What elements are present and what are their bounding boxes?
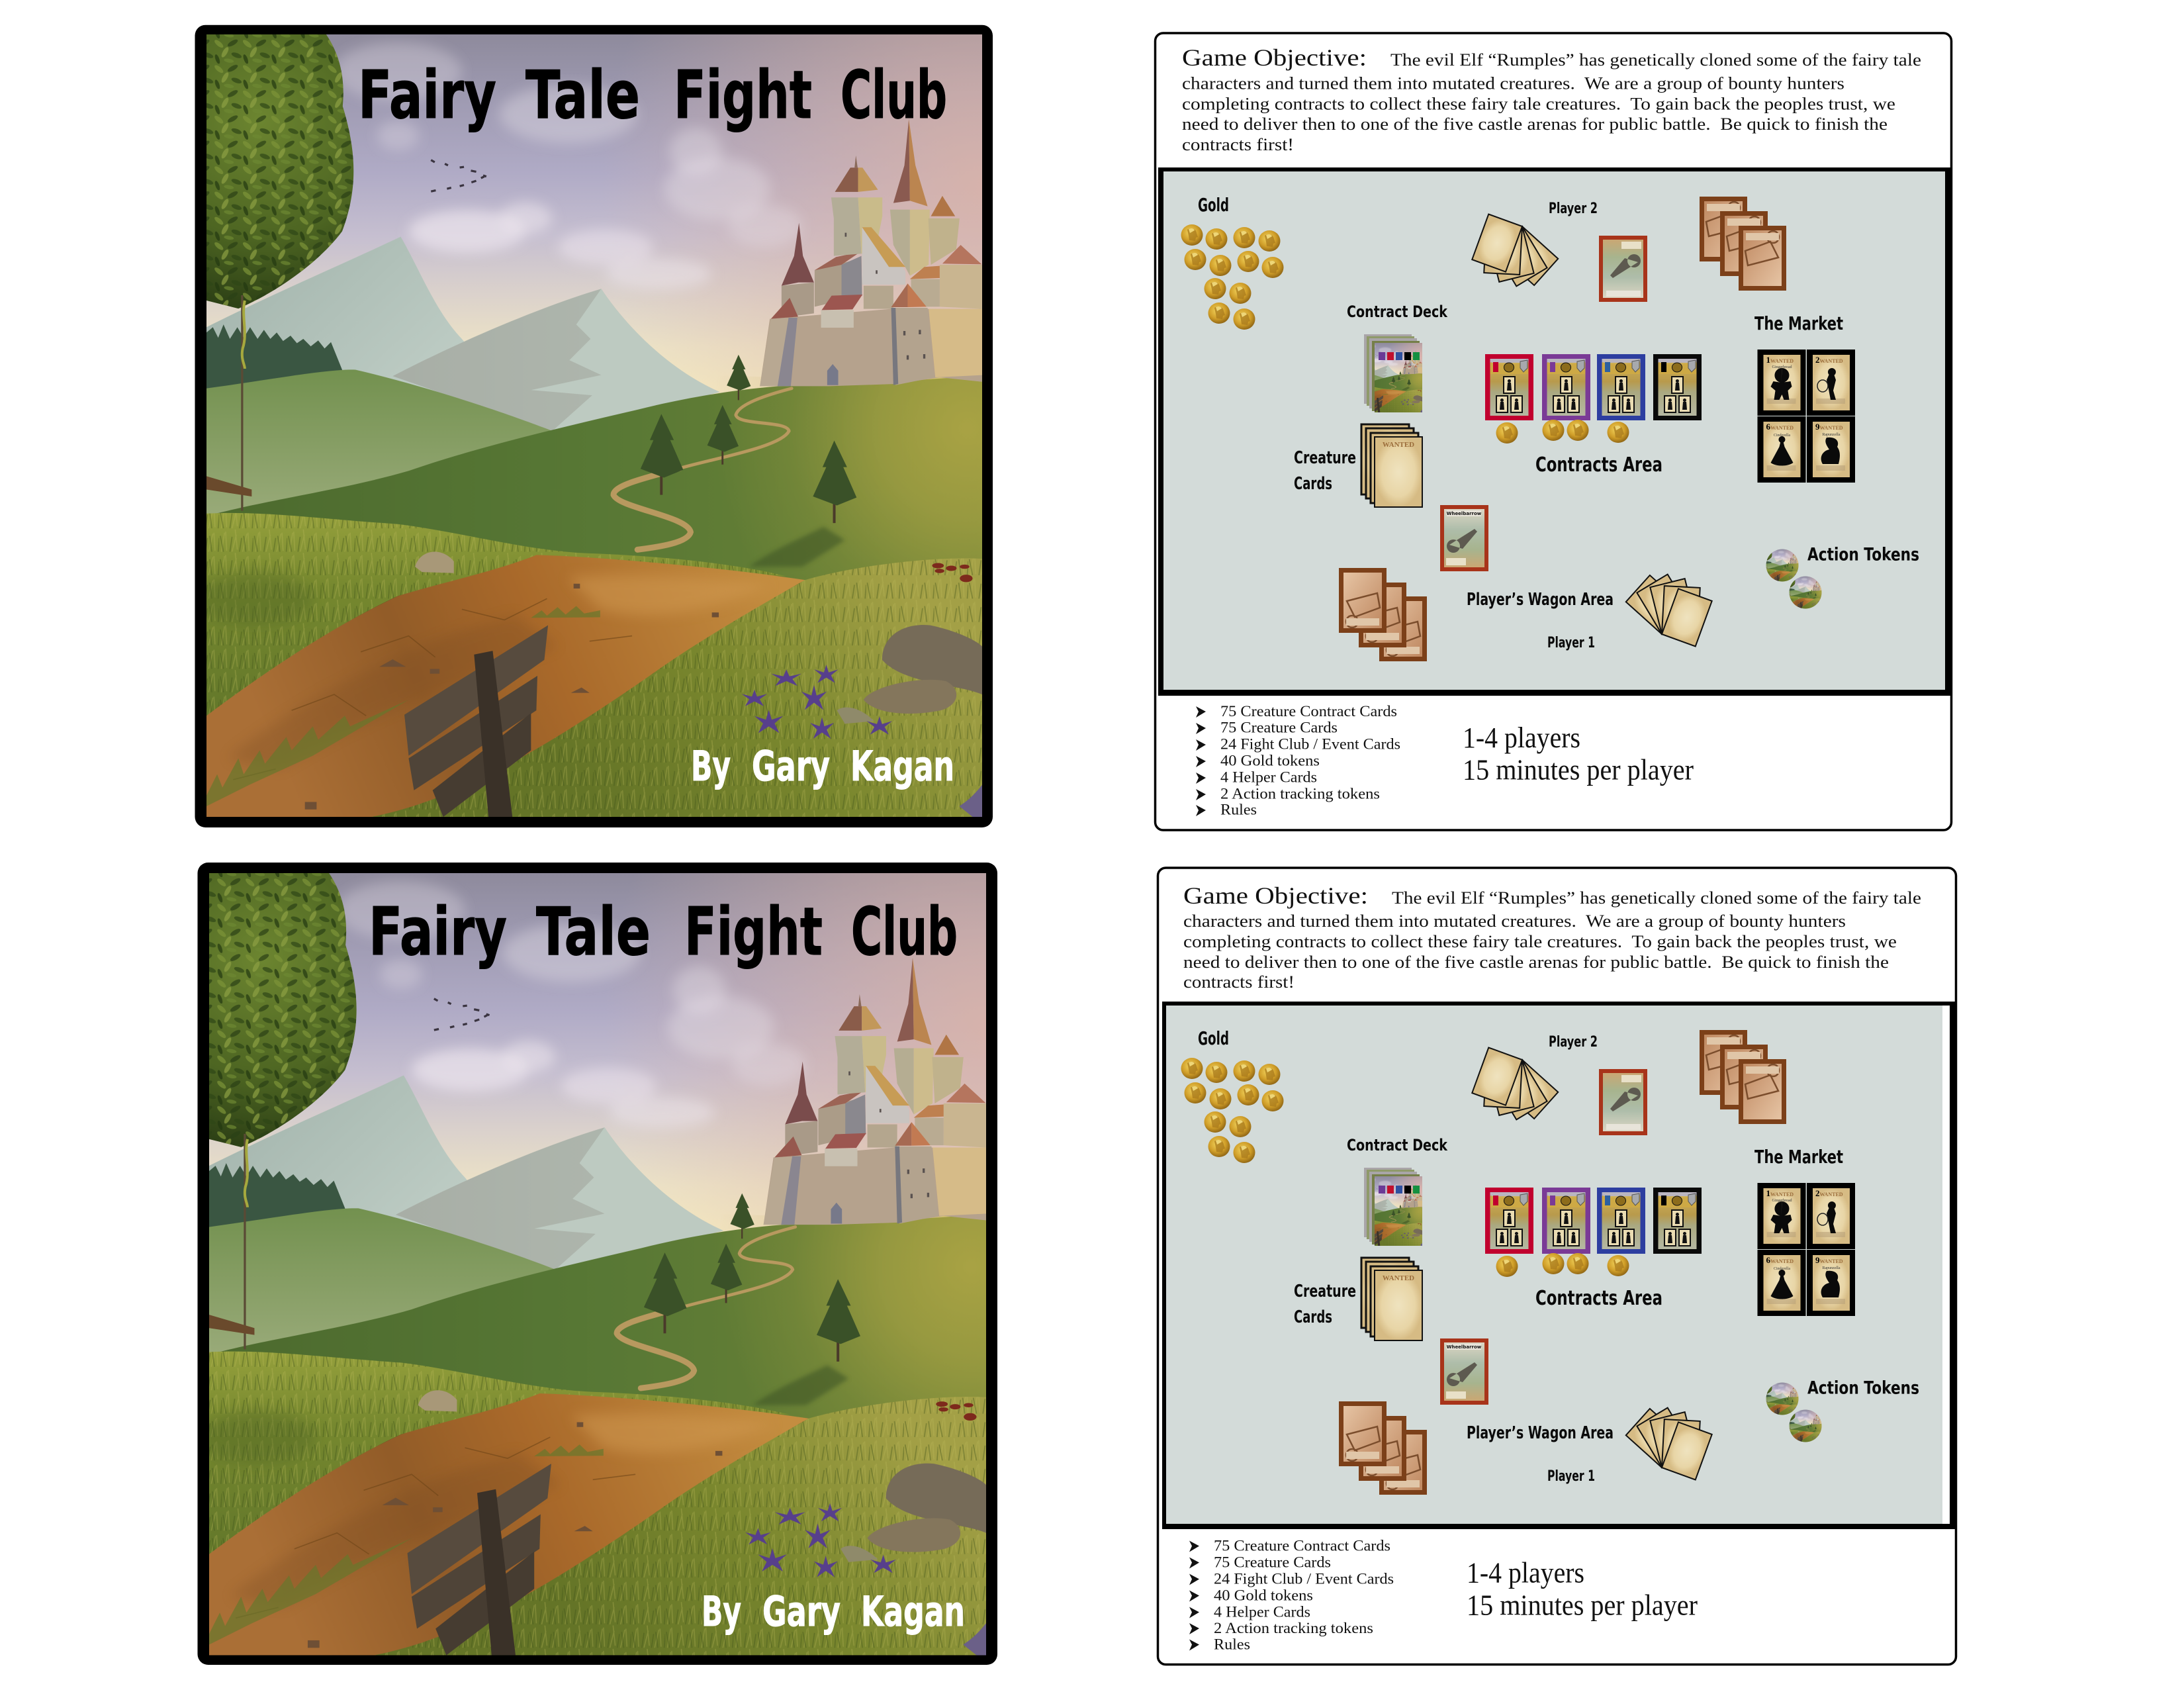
contents list: 4 Helper Cards bbox=[1214, 1603, 1310, 1620]
foreground left grass bbox=[196, 513, 786, 726]
gold coins bbox=[1181, 224, 1284, 330]
board labels: Player’s Wagon Area bbox=[1467, 590, 1614, 610]
board labels: Player 2 bbox=[1549, 1034, 1598, 1051]
contents list: 2 Action tracking tokens bbox=[1220, 785, 1380, 802]
title: Fairy bbox=[358, 56, 496, 134]
tree foliage bbox=[206, 34, 353, 308]
market card: rapunzel bbox=[1807, 416, 1855, 483]
board labels: Player’s Wagon Area bbox=[1467, 1423, 1614, 1443]
board pieces bbox=[1181, 1030, 1855, 1495]
cover: top left bbox=[195, 25, 993, 827]
market card: witch bbox=[1807, 350, 1855, 416]
board labels: Contract Deck bbox=[1347, 303, 1448, 321]
author byline: By bbox=[691, 742, 731, 790]
contract: red bbox=[1485, 354, 1533, 420]
game objective text: need to deliver then to one of the five castle arenas for public battle. Be quick to finish the bbox=[1182, 115, 1888, 134]
board labels: Creature bbox=[1294, 448, 1356, 468]
player 2 hand cards bbox=[1700, 197, 1786, 291]
player 2 wagon card bbox=[1599, 236, 1647, 302]
player count and time: 15 minutes per player bbox=[1463, 753, 1694, 786]
board labels: The Market bbox=[1754, 1146, 1843, 1168]
player 1 hand cards bbox=[1339, 568, 1427, 661]
birds bbox=[431, 160, 486, 191]
author byline: Kagan bbox=[850, 742, 954, 790]
board pieces bbox=[1181, 197, 1855, 661]
contents list: 2 Action tracking tokens bbox=[1214, 1620, 1373, 1636]
market card: witch: 2 bbox=[1815, 355, 1820, 365]
game objective text bbox=[1183, 882, 1921, 992]
cover: bottom left bbox=[197, 863, 997, 1665]
market card: cinderella: Cinderella bbox=[1774, 434, 1790, 438]
player count and time bbox=[1467, 1557, 1698, 1622]
market card: gingerbread: 1 bbox=[1766, 355, 1770, 365]
contents list: 40 Gold tokens bbox=[1214, 1587, 1313, 1603]
game objective text: Game Objective: bbox=[1183, 882, 1368, 909]
game objective text bbox=[1182, 44, 1921, 154]
title: Fairy bbox=[369, 893, 507, 970]
pine trees bbox=[641, 355, 856, 523]
board frame bbox=[1162, 1002, 1956, 1529]
market card: gingerbread bbox=[1758, 350, 1805, 416]
board labels: Player 2 bbox=[1549, 201, 1598, 217]
contents list: 75 Creature Cards bbox=[1220, 719, 1338, 736]
cover illustration bbox=[206, 34, 982, 817]
panel: bottom right game sheet bbox=[1158, 868, 1956, 1664]
title: Tale bbox=[525, 56, 640, 134]
corner flower bbox=[959, 785, 982, 817]
wheelbarrow card: Wheelbarrow bbox=[1447, 511, 1482, 516]
panel: top right game sheet bbox=[1156, 33, 1951, 830]
game objective text: completing contracts to collect these fairy tale creatures. To gain back the peoples trust, we bbox=[1183, 932, 1897, 951]
rocks bbox=[415, 551, 982, 724]
author byline: By bbox=[702, 1587, 741, 1636]
market cards bbox=[1758, 350, 1855, 483]
contents list: 75 Creature Cards bbox=[1214, 1554, 1331, 1570]
contents list: 24 Fight Club / Event Cards bbox=[1214, 1570, 1394, 1587]
dirt path bbox=[206, 555, 805, 817]
game objective text: contracts first! bbox=[1182, 135, 1294, 154]
market card: cinderella: 6 bbox=[1766, 422, 1771, 432]
board frame bbox=[1158, 167, 1951, 696]
board labels: The Market bbox=[1754, 312, 1843, 334]
game objective text: contracts first! bbox=[1183, 972, 1295, 992]
grass tufts on path bbox=[206, 606, 600, 806]
contract coins bbox=[1496, 420, 1629, 444]
game objective text: need to deliver then to one of the five castle arenas for public battle. Be quick to finish the bbox=[1183, 953, 1889, 972]
winding road bbox=[614, 389, 792, 549]
board labels: Action Tokens bbox=[1807, 1378, 1919, 1398]
contract: purple bbox=[1542, 354, 1590, 420]
contents list bbox=[1196, 703, 1400, 818]
left hill bbox=[206, 369, 552, 519]
contents list: 75 Creature Contract Cards bbox=[1220, 703, 1397, 720]
contract cards bbox=[1485, 354, 1702, 420]
board labels: Action Tokens bbox=[1807, 544, 1919, 565]
wooden signpost bbox=[404, 626, 548, 817]
cover frame bbox=[195, 25, 993, 827]
game objective text: The evil Elf “Rumples” has genetically cloned some of the fairy tale bbox=[1392, 888, 1921, 908]
player count and time bbox=[1463, 722, 1694, 786]
board labels: Cards bbox=[1294, 1307, 1332, 1327]
action tokens bbox=[1765, 549, 1822, 609]
middle hill bbox=[206, 375, 982, 583]
title bbox=[369, 893, 958, 970]
player count and time: 1-4 players bbox=[1463, 722, 1580, 754]
board labels: Gold bbox=[1198, 194, 1229, 216]
cover frame bbox=[197, 863, 997, 1665]
contents list: Rules bbox=[1214, 1636, 1250, 1652]
board labels: Player 1 bbox=[1547, 1468, 1595, 1485]
board labels: Cards bbox=[1294, 474, 1332, 494]
board labels: Contract Deck bbox=[1347, 1136, 1448, 1154]
board labels bbox=[1198, 194, 1919, 651]
board labels: Contracts Area bbox=[1535, 1287, 1662, 1310]
board labels bbox=[1198, 1027, 1919, 1485]
purple flowers bbox=[742, 665, 892, 739]
title: Club bbox=[841, 56, 947, 134]
board surface bbox=[1166, 1006, 1950, 1524]
game objective text: completing contracts to collect these fairy tale creatures. To gain back the peoples trust, we bbox=[1182, 94, 1895, 114]
contract: black bbox=[1653, 354, 1702, 420]
market card: rapunzel: 9 bbox=[1815, 422, 1820, 432]
market card: gingerbread: Gingerbread bbox=[1772, 365, 1792, 369]
market card: cinderella bbox=[1758, 416, 1805, 483]
board surface bbox=[1163, 171, 1945, 690]
creature deck bbox=[1361, 424, 1422, 507]
contents list: 40 Gold tokens bbox=[1220, 752, 1320, 769]
contents list bbox=[1189, 1537, 1394, 1652]
player 2 hand fan bbox=[1472, 214, 1558, 286]
game objective text: Game Objective: bbox=[1182, 44, 1367, 71]
author byline: Gary bbox=[752, 742, 830, 790]
player 1 hand fan bbox=[1626, 575, 1712, 646]
cover illustration bbox=[209, 228, 1661, 1655]
contents list: Rules bbox=[1220, 801, 1257, 818]
board labels: Player 1 bbox=[1547, 635, 1595, 651]
panel outline bbox=[1156, 33, 1951, 830]
rope swing bbox=[206, 295, 251, 511]
title: Tale bbox=[536, 893, 651, 970]
forest bbox=[206, 324, 342, 397]
board labels: Contracts Area bbox=[1535, 453, 1662, 477]
contents list: 24 Fight Club / Event Cards bbox=[1220, 736, 1400, 752]
market card: rapunzel: Rapunzella bbox=[1823, 433, 1841, 437]
contract deck bbox=[1351, 334, 1422, 412]
creature deck: WANTED bbox=[1383, 441, 1414, 449]
panel outline bbox=[1158, 868, 1956, 1664]
author byline bbox=[691, 742, 954, 790]
red flowers bbox=[932, 563, 973, 582]
game objective text: characters and turned them into mutated creatures. We are a group of bounty hunters bbox=[1182, 74, 1844, 93]
author byline: Gary bbox=[762, 1587, 841, 1636]
sky bbox=[206, 34, 982, 418]
author byline: Kagan bbox=[861, 1587, 965, 1636]
title: Fight bbox=[674, 56, 812, 134]
game objective text: characters and turned them into mutated creatures. We are a group of bounty hunters bbox=[1183, 912, 1846, 931]
title: Fight bbox=[684, 893, 823, 970]
mountains bbox=[206, 237, 720, 434]
clouds bbox=[334, 42, 802, 290]
wheelbarrow card bbox=[1440, 505, 1488, 571]
author byline bbox=[702, 1587, 965, 1636]
game objective text: The evil Elf “Rumples” has genetically cloned some of the fairy tale bbox=[1390, 50, 1921, 70]
castle bbox=[760, 119, 982, 386]
title bbox=[358, 56, 947, 134]
board labels: Creature bbox=[1294, 1282, 1356, 1301]
title: Club bbox=[851, 893, 958, 970]
contract: blue bbox=[1597, 354, 1645, 420]
contents list: 75 Creature Contract Cards bbox=[1214, 1537, 1390, 1554]
player count and time: 1-4 players bbox=[1467, 1557, 1584, 1589]
player count and time: 15 minutes per player bbox=[1467, 1589, 1698, 1622]
board labels: Gold bbox=[1198, 1027, 1229, 1049]
contents list: 4 Helper Cards bbox=[1220, 769, 1317, 785]
foreground right grass bbox=[371, 558, 982, 817]
